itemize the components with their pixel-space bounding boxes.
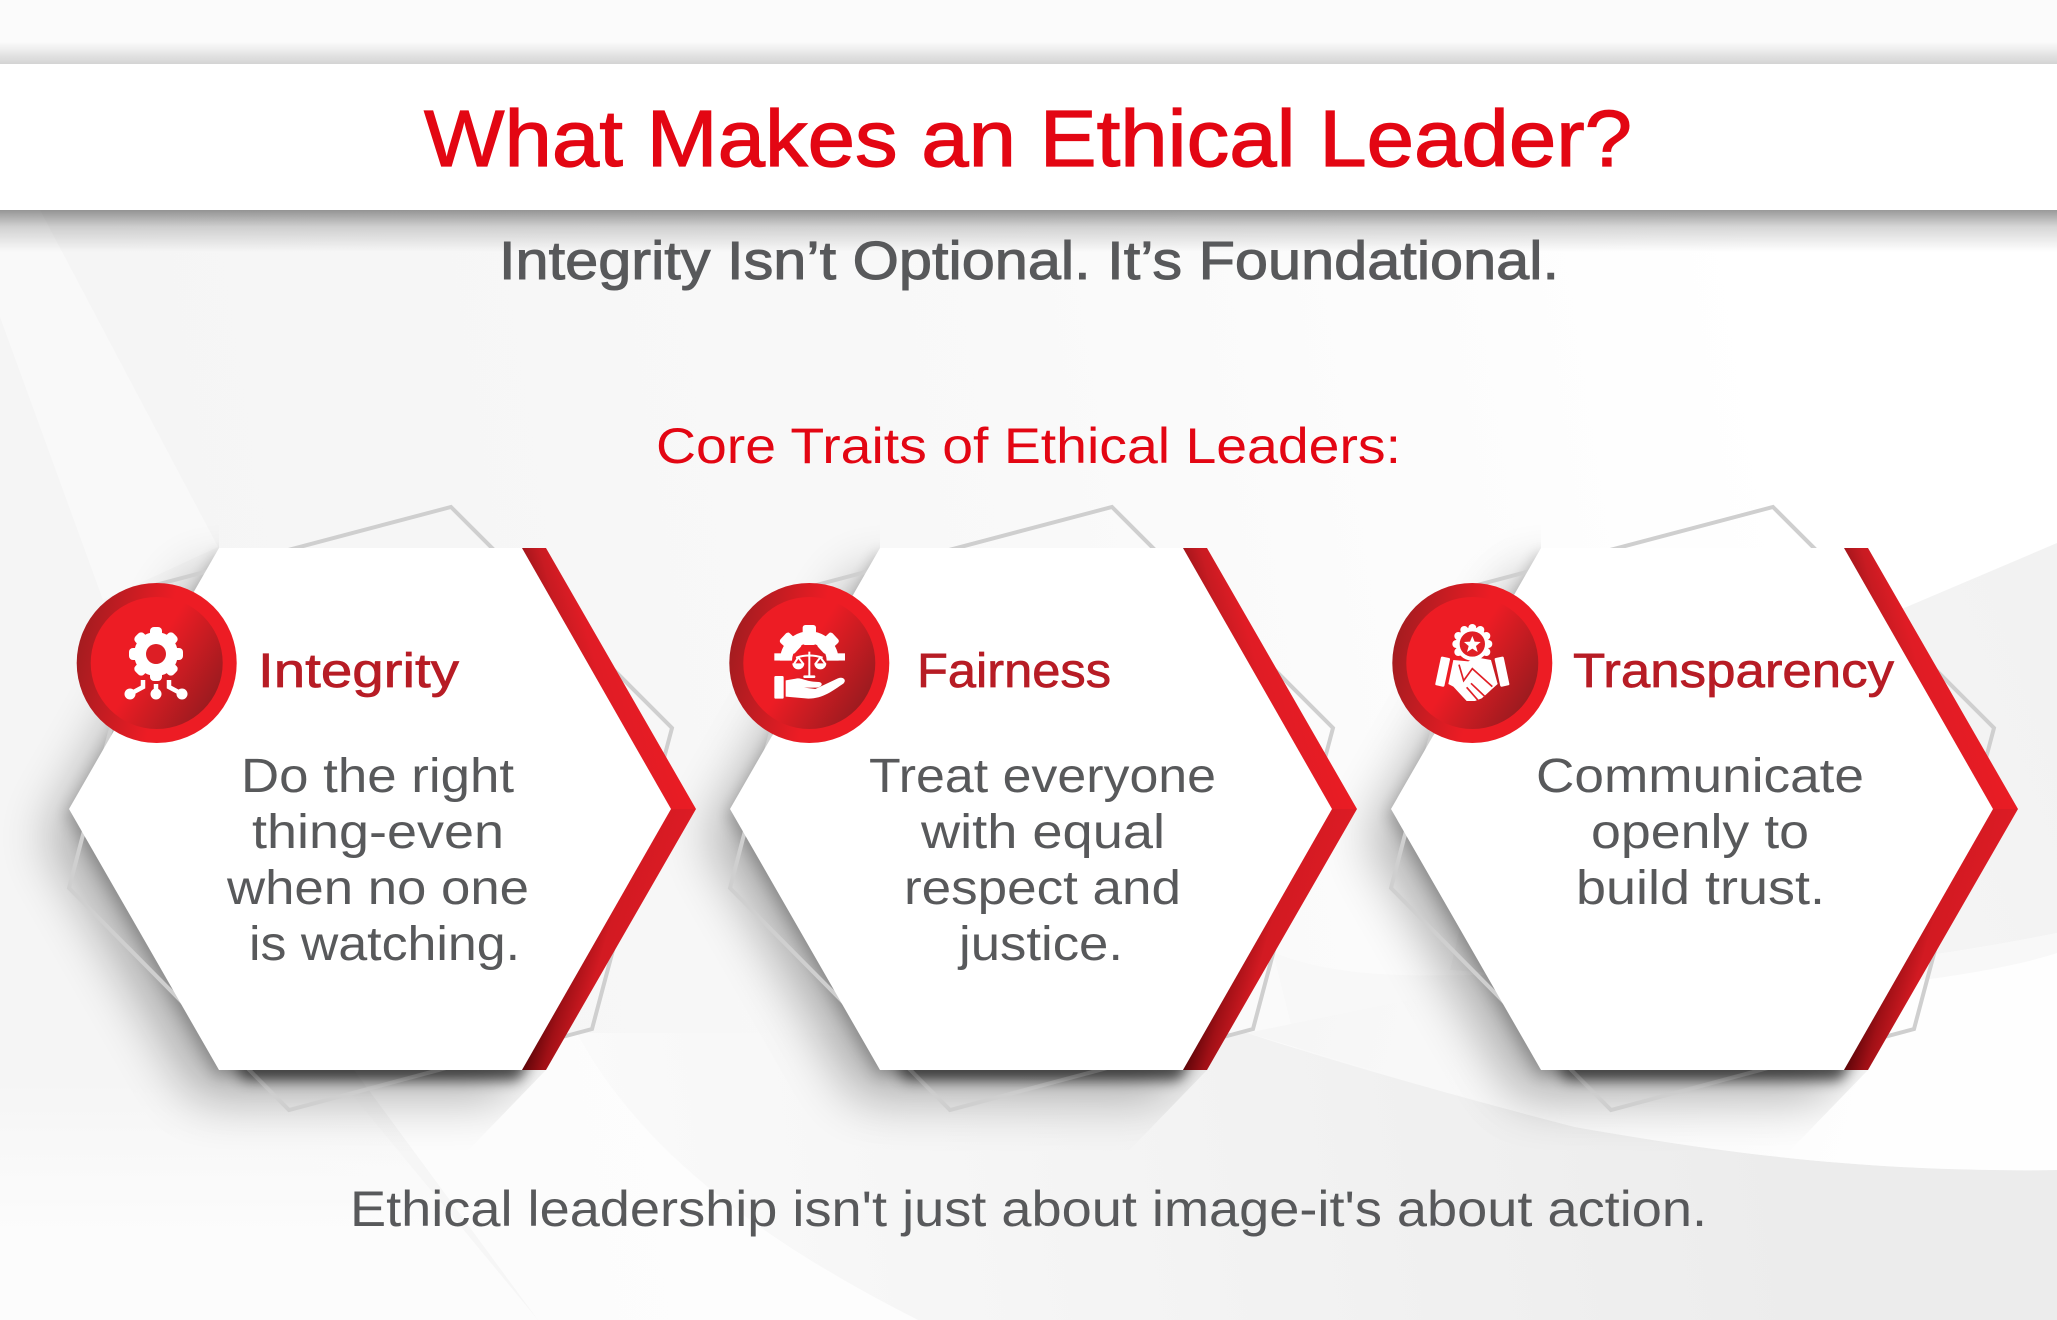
heading: Integrity (258, 645, 459, 698)
title banner (0, 64, 2057, 210)
icon: handshake and badge (1392, 583, 1552, 743)
red edge (1844, 548, 2018, 1070)
panel: fairness (729, 507, 1357, 1110)
footer statement: Ethical leadership isn't just about image-it's about action. (350, 1181, 1707, 1237)
outline hexagon (730, 507, 1333, 1110)
hexagon card (1391, 548, 1993, 1070)
body text: thing-even (252, 806, 504, 859)
body text (226, 750, 529, 971)
heading: Fairness (917, 645, 1111, 698)
body text (869, 750, 1216, 971)
hexagon card (69, 548, 671, 1070)
body text: Communicate (1536, 750, 1864, 803)
title: What Makes an Ethical Leader? (424, 94, 1632, 183)
body text: Treat everyone (869, 750, 1216, 803)
body text: openly to (1591, 806, 1809, 859)
body text (1536, 750, 1864, 915)
bottom edge shadow (893, 1060, 1191, 1080)
outline hexagon (1391, 507, 1994, 1110)
body text: respect and (904, 862, 1181, 915)
icon: gear with network (77, 583, 237, 743)
hexagon card (730, 548, 1332, 1070)
body text: justice. (957, 918, 1123, 971)
subtitle: Integrity Isn’t Optional. It’s Foundational. (499, 231, 1559, 291)
red edge (522, 548, 696, 1070)
hexagon drop shadows (47, 554, 1990, 1098)
body text: when no one (226, 862, 529, 915)
body text: Do the right (241, 750, 514, 803)
outline hexagon (69, 507, 672, 1110)
body text: with equal (920, 806, 1165, 859)
panel: integrity (69, 507, 696, 1110)
red edge (1183, 548, 1357, 1070)
heading: Transparency (1573, 645, 1894, 698)
banner shadow (0, 42, 2057, 252)
bottom edge shadow (232, 1060, 530, 1080)
bottom edge shadow (1554, 1060, 1852, 1080)
panel: transparency (1391, 507, 2018, 1110)
body text: build trust. (1576, 862, 1825, 915)
body text: is watching. (249, 918, 520, 971)
icon: scales and hand (729, 583, 889, 743)
section heading: Core Traits of Ethical Leaders: (656, 418, 1401, 474)
